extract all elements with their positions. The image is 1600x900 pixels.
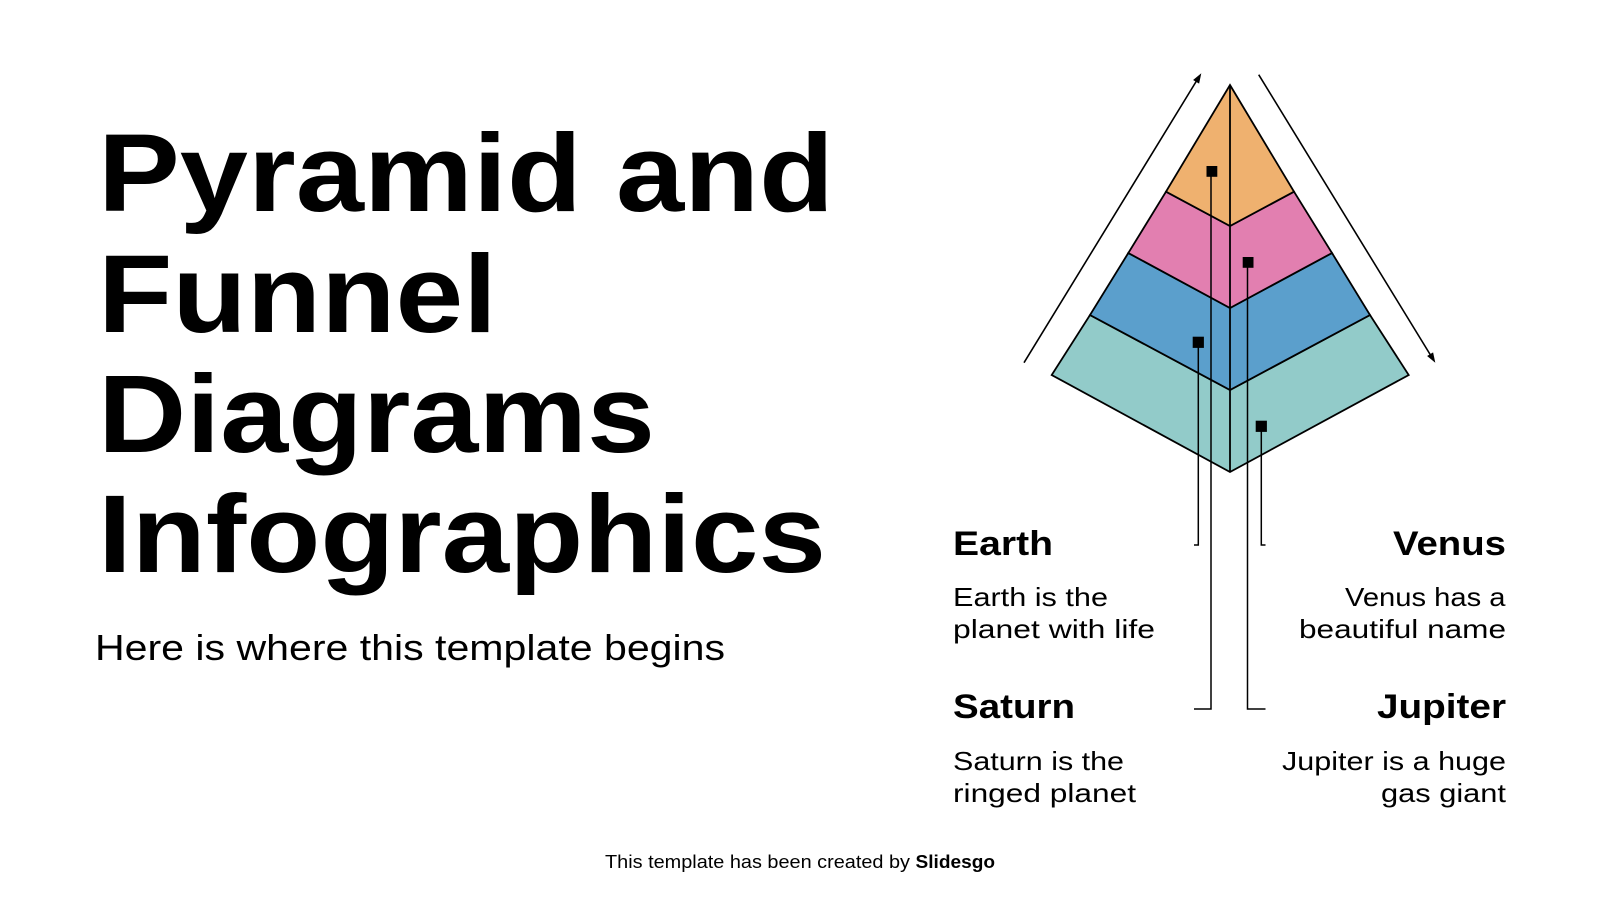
- text block: Venus: Venus has a: [1345, 582, 1506, 612]
- pyramid diagram: [1052, 85, 1409, 472]
- title: Funnel: [98, 233, 497, 356]
- text block: Venus: [1299, 525, 1506, 644]
- layer: pink: [1128, 192, 1332, 308]
- title: [98, 112, 834, 596]
- layer: orange: [1166, 85, 1294, 226]
- arrow: down: [1259, 75, 1435, 363]
- text block: Saturn: Saturn: [953, 688, 1075, 726]
- connector: Saturn: [1194, 166, 1217, 709]
- text block: Earth: [953, 525, 1155, 644]
- footer credit: This template has been created by: [605, 852, 910, 872]
- connector: Earth: [1193, 337, 1204, 545]
- text block: Saturn: ringed planet: [953, 778, 1137, 808]
- subtitle: Here is where this template begins: [95, 627, 725, 668]
- connector: Jupiter: [1243, 257, 1266, 709]
- center line: [1229, 85, 1231, 472]
- connector: Venus: [1256, 421, 1267, 545]
- title: Pyramid and: [98, 112, 834, 235]
- title: Diagrams: [98, 353, 655, 476]
- text block: Earth: Earth: [953, 525, 1053, 563]
- footer credit: Slidesgo: [916, 852, 995, 872]
- text block: Earth: planet with life: [953, 614, 1155, 644]
- text block: Jupiter: [1282, 688, 1507, 808]
- layer: blue: [1090, 253, 1370, 390]
- text block: Jupiter: Jupiter: [1377, 688, 1506, 726]
- text block: Jupiter: Jupiter is a huge: [1282, 746, 1506, 776]
- text block: Earth: Earth is the: [953, 582, 1108, 612]
- text block: Saturn: Saturn is the: [953, 746, 1124, 776]
- layer: teal: [1052, 315, 1409, 472]
- text block: Jupiter: gas giant: [1381, 778, 1507, 808]
- text block: Venus: Venus: [1393, 525, 1506, 563]
- arrow: up: [1024, 73, 1201, 363]
- title: Infographics: [98, 473, 826, 596]
- text block: Venus: beautiful name: [1299, 614, 1506, 644]
- text block: Saturn: [953, 688, 1137, 808]
